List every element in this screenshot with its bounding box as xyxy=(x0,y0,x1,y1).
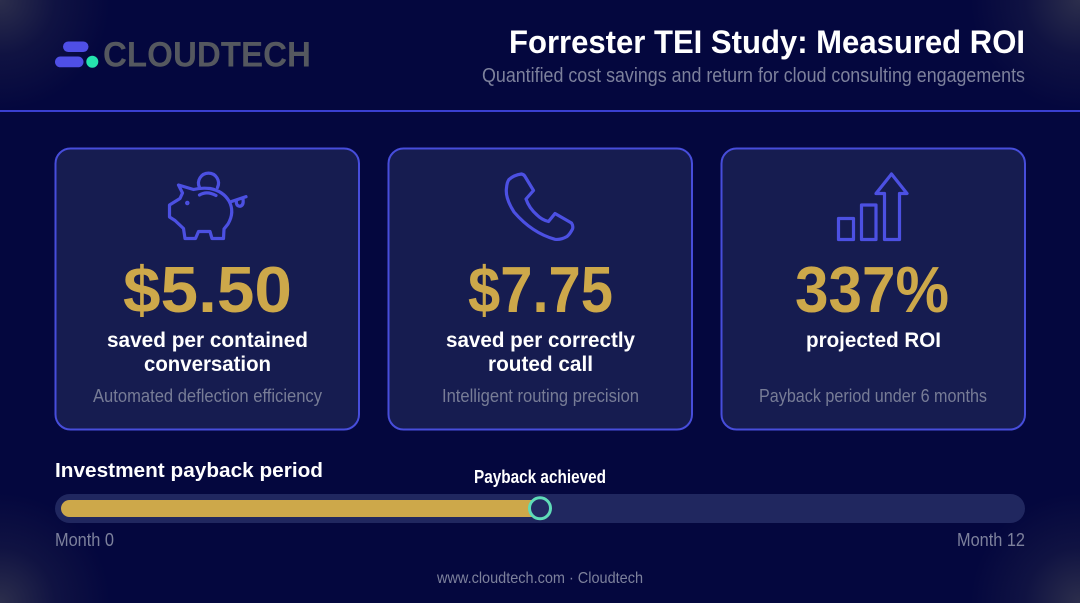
label: saved per contained xyxy=(107,329,308,352)
footer: www.cloudtech.com · Cloudtech xyxy=(436,570,643,587)
label: conversation xyxy=(144,353,271,376)
value: $7.75 xyxy=(468,253,613,326)
panel: routed call savings xyxy=(388,148,692,430)
description: Automated deflection efficiency xyxy=(93,386,322,406)
icon: piggy bank xyxy=(170,173,246,238)
label: saved per correctly xyxy=(446,329,635,352)
value: 337% xyxy=(795,253,949,326)
panel: contained conversation savings xyxy=(56,148,359,430)
logo: Cloudtech: CLOUDTECH xyxy=(103,36,311,74)
panel: projected ROI xyxy=(722,148,1025,430)
description: Payback period under 6 months xyxy=(759,386,987,406)
title: Forrester TEI Study: Measured ROI xyxy=(509,24,1025,60)
label: projected ROI xyxy=(806,329,941,352)
heading: investment payback period: Investment payback period xyxy=(55,460,323,482)
axis label: month 0: Month 0 xyxy=(55,530,114,550)
label xyxy=(107,329,308,376)
value: $5.50 xyxy=(123,253,292,326)
axis label: month 12: Month 12 xyxy=(957,530,1025,550)
icon: phone xyxy=(506,174,573,239)
milestone label: Payback achieved xyxy=(474,467,606,487)
icon: growth chart with arrow xyxy=(838,174,907,240)
label: routed call xyxy=(488,353,593,376)
subtitle: Quantified cost savings and return for cloud consulting engagements xyxy=(482,65,1025,87)
label xyxy=(446,329,635,376)
description: Intelligent routing precision xyxy=(442,386,639,406)
progress bar xyxy=(55,494,1025,523)
